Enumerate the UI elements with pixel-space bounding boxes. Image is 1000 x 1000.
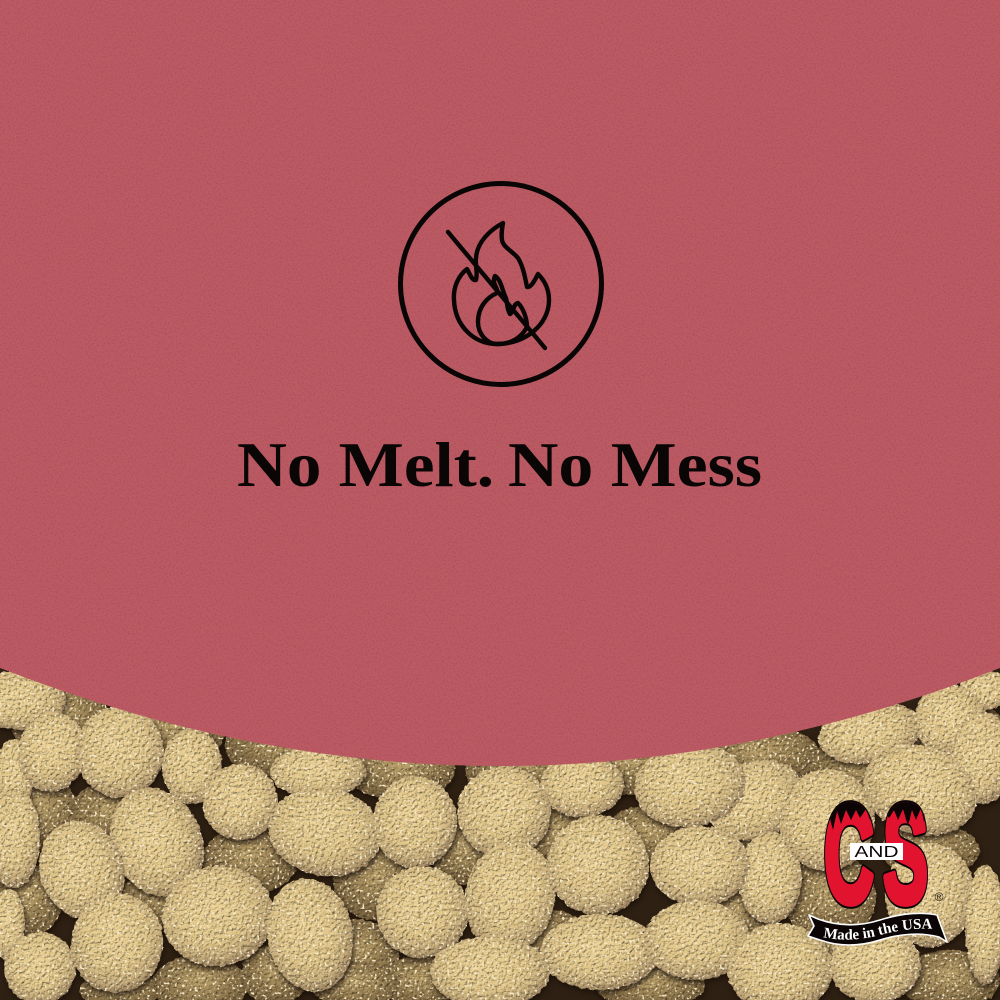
logo banner	[807, 912, 948, 946]
logo: C and S, Made in the USA: S	[883, 778, 928, 932]
photo: coated pellets background	[0, 640, 1000, 1000]
heading: No Melt.	[237, 429, 494, 500]
logo letters: C	[824, 778, 874, 932]
pink curved panel	[0, 0, 1000, 766]
logo AND box: AND	[854, 844, 898, 861]
heading second part: No Mess	[508, 429, 762, 500]
front layer pellets	[0, 670, 1000, 1000]
logo letters: C	[824, 778, 874, 932]
logo banner: Made in the USA	[823, 918, 932, 940]
logo letters: C	[824, 778, 874, 932]
logo AND box	[850, 843, 903, 861]
icon: crossed-out flame in circle	[400, 184, 602, 384]
back layer pellets	[0, 680, 1000, 1000]
logo: C and S, Made in the USA: S	[883, 778, 928, 932]
registered mark: ®	[935, 890, 944, 904]
logo: C and S, Made in the USA	[807, 778, 948, 946]
logo: C and S, Made in the USA: S	[883, 778, 928, 932]
